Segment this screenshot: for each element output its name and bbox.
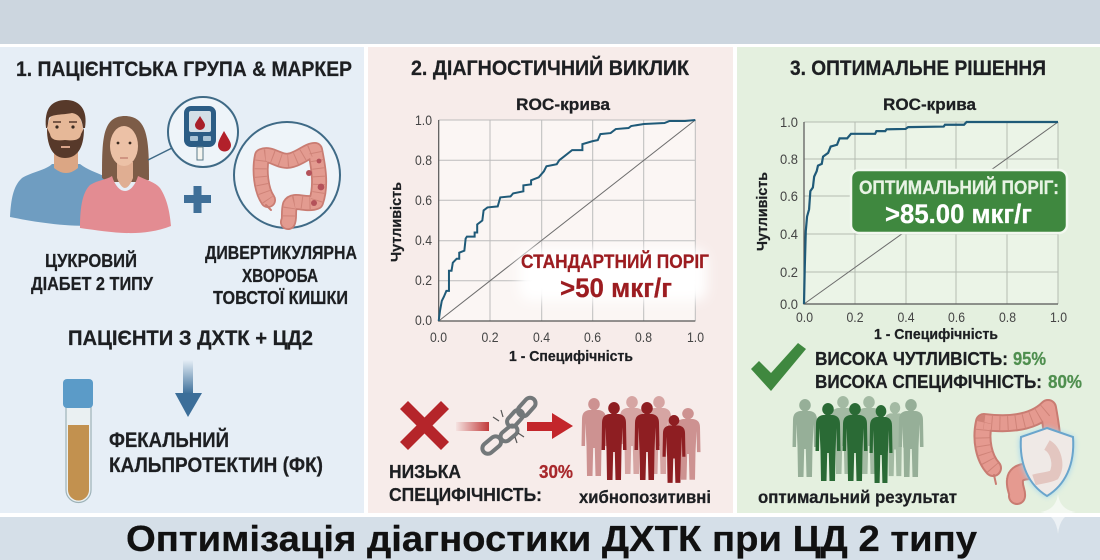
chart: ROC curve standard <box>388 113 704 365</box>
icon: crowd false positives <box>582 396 700 483</box>
metrics: sensitivity and specificity: ВИСОКА СПЕЦИФІЧНІСТЬ: <box>815 371 1042 392</box>
icon: test tube <box>63 379 93 502</box>
label: optimal result: оптимальний результат <box>758 487 957 507</box>
chart: ROC curve standard: 0.2 <box>482 330 498 345</box>
icon: colon with shield <box>982 408 1074 497</box>
label: low specificity: СПЕЦИФІЧНІСТЬ: <box>389 484 542 505</box>
label: diabetes <box>31 250 154 294</box>
callout: standard threshold: >50 мкг/г <box>560 273 672 303</box>
chart: ROC curve optimal: 0.6 <box>948 310 965 325</box>
chart: ROC curve standard: 0.2 <box>415 273 432 288</box>
heading: panel 1: 1. ПАЦІЄНТСЬКА ГРУПА & МАРКЕР <box>16 58 352 81</box>
chart: ROC curve optimal: 0.2 <box>846 310 864 325</box>
callout: standard threshold: СТАНДАРТНИЙ ПОРІГ <box>521 251 709 273</box>
callout: optimal threshold: >85.00 мкг/г <box>885 199 1032 229</box>
heading: panel 3: 3. ОПТИМАЛЬНЕ РІШЕННЯ <box>790 57 1046 80</box>
chart: ROC curve standard: 1.0 <box>687 330 704 345</box>
callout: optimal threshold: ОПТИМАЛЬНИЙ ПОРІГ: <box>859 177 1059 199</box>
chart: ROC curve standard: 0.0 <box>430 330 447 345</box>
panel: diagnostic challenge <box>368 47 733 513</box>
label: fecal calprotectin: ФЕКАЛЬНИЙ <box>109 428 229 452</box>
panel: patient group and marker <box>0 47 364 513</box>
metrics: sensitivity and specificity: 80% <box>1048 371 1082 392</box>
label: false positives: хибнопозитивні <box>579 487 711 507</box>
icon: man <box>10 100 104 226</box>
icon: woman <box>80 116 171 233</box>
chart: ROC curve optimal: 0.4 <box>898 310 915 325</box>
label: diverticular disease <box>205 243 357 308</box>
chart: ROC curve standard: 0.8 <box>635 330 652 345</box>
icon: sparkle <box>1040 494 1076 534</box>
chart: ROC curve standard: 1.0 <box>415 113 432 128</box>
chart: ROC curve standard: 0.8 <box>415 153 432 168</box>
arrow: down <box>175 360 202 417</box>
metrics: sensitivity and specificity: 95% <box>1013 348 1046 369</box>
chart: ROC curve optimal: 0.8 <box>999 310 1016 325</box>
chart: ROC curve optimal: Чутливість <box>754 172 771 251</box>
label: fecal calprotectin <box>109 428 323 477</box>
chart: ROC curve optimal: 1 - Специфічність <box>874 326 998 343</box>
title: Оптимізація діагностики ДХТК при ЦД 2 типу <box>126 518 977 559</box>
label: diabetes: ДІАБЕТ 2 ТИПУ <box>31 274 154 294</box>
label: diverticular disease: ДИВЕРТИКУЛЯРНА <box>205 243 357 263</box>
chart: ROC curve optimal <box>754 115 1067 343</box>
chart: ROC curve standard: 0.4 <box>533 330 550 345</box>
top band <box>0 0 1100 44</box>
label: diverticular disease: ТОВСТОЇ КИШКИ <box>213 288 348 308</box>
chart: ROC curve optimal: 0.2 <box>780 265 798 280</box>
chart: ROC curve optimal: 0.4 <box>780 227 798 242</box>
bottom band with title <box>0 494 1100 560</box>
label: patients: ПАЦІЄНТИ З ДХТК + ЦД2 <box>68 327 313 350</box>
metrics: sensitivity and specificity <box>815 348 1082 392</box>
chart: ROC curve standard: 0.0 <box>415 313 432 328</box>
metrics: sensitivity and specificity: ВИСОКА ЧУТЛИВІСТЬ: <box>815 348 1008 369</box>
chart: ROC curve optimal: 1.0 <box>1050 310 1067 325</box>
label: low specificity <box>389 461 542 505</box>
chart: ROC curve optimal: 0.8 <box>780 152 798 167</box>
chart: ROC curve standard: 0.6 <box>415 193 432 208</box>
callout: standard threshold <box>519 249 709 303</box>
value: 30%: 30% <box>539 461 573 482</box>
icon: check mark <box>751 343 806 391</box>
panel: optimal solution <box>737 47 1100 513</box>
label: diabetes: ЦУКРОВИЙ <box>45 250 137 271</box>
chart: ROC curve standard: Чутливість <box>388 182 405 262</box>
icon: glucose meter in circle <box>148 97 238 167</box>
icon: plus <box>184 186 211 213</box>
label: low specificity: НИЗЬКА <box>389 461 461 482</box>
icon: red cross <box>400 401 449 450</box>
chart: ROC curve standard: 0.6 <box>584 330 601 345</box>
chart: ROC curve optimal: 0.6 <box>780 189 798 204</box>
icon: broken chain with arrow <box>456 395 573 456</box>
heading: panel 2: 2. ДІАГНОСТИЧНИЙ ВИКЛИК <box>411 56 689 80</box>
chart title: ROC-крива <box>516 96 611 114</box>
chart: ROC curve optimal: 0.0 <box>780 297 798 312</box>
chart: ROC curve standard: 0.4 <box>415 233 432 248</box>
chart: ROC curve optimal: 0.0 <box>796 310 813 325</box>
chart: ROC curve standard: 1 - Специфічність <box>509 348 633 365</box>
icon: crowd optimal <box>792 396 924 483</box>
icon: colon in circle <box>234 122 340 228</box>
callout: optimal threshold <box>851 170 1067 233</box>
chart title: ROC-крива <box>883 96 977 114</box>
label: diverticular disease: ХВОРОБА <box>242 266 318 286</box>
label: fecal calprotectin: КАЛЬПРОТЕКТИН (ФК) <box>109 454 323 477</box>
chart: ROC curve optimal: 1.0 <box>780 115 798 130</box>
